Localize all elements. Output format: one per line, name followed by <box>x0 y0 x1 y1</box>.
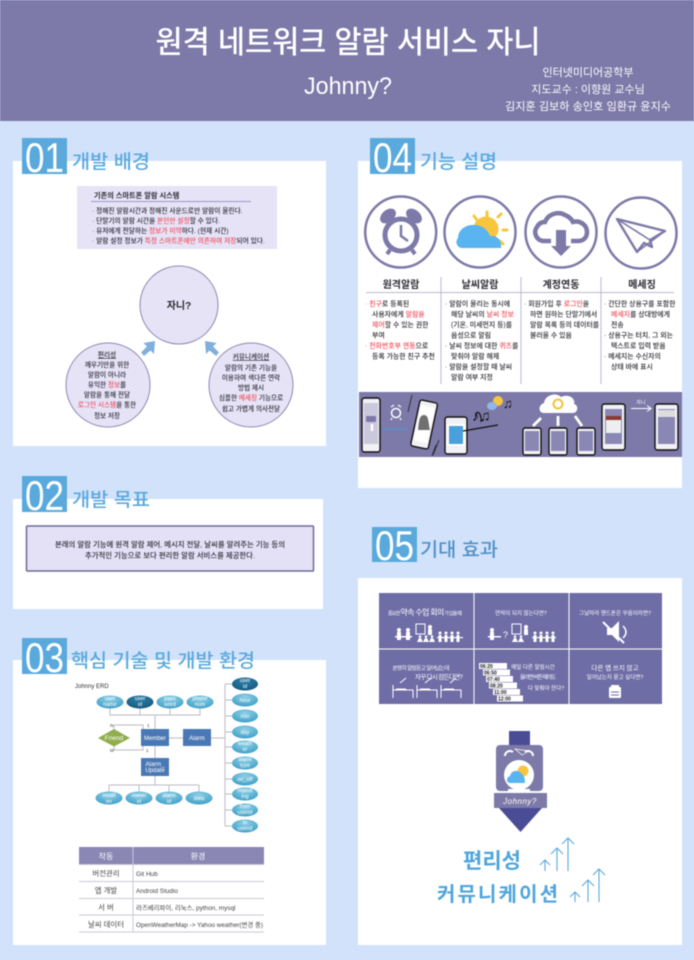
text: messaging: · 메세지는 수신자의 <box>604 352 661 360</box>
ER diagram: 1 <box>147 723 150 728</box>
cell: wake up check: 다른 앱 쓰지 않고 <box>591 663 639 672</box>
circle: convenience: 알람이 아니라 <box>88 370 126 379</box>
cell: wake up check: 일어났는지 묻고 싶다면? <box>587 673 643 681</box>
feature titles: 날씨알람 <box>462 278 498 291</box>
text: messaging <box>604 299 676 371</box>
text: weather alarm: 맞춰야 알람 해제 <box>451 352 499 360</box>
arrows: communication growth <box>570 869 605 902</box>
cell: oversleeping: 자꾸 다시 잠든다면? <box>415 672 463 681</box>
environment table: 서 버 <box>98 903 114 912</box>
panel: 02 goal <box>13 472 323 609</box>
text: account sync: 알람 목록 등의 데이터를 <box>530 320 600 329</box>
member attributes: user <box>135 696 145 702</box>
heading 05: 기대 효과 <box>420 539 498 561</box>
cell: oversleeping <box>392 664 463 698</box>
text: messaging: 텍스트로 입력 받음 <box>611 341 666 350</box>
text: communication: 커뮤니케이션 <box>437 883 558 906</box>
existing alarm system box: · 알람 설정 정보가 특정 스마트폰에만 의존하여 저장되어 있다. <box>92 236 265 245</box>
member attributes: phone <box>192 696 208 702</box>
environment table: 라즈베리파이, 리눅스, python, mysql <box>136 903 235 912</box>
alarm attributes <box>232 678 258 832</box>
feature illustration strip <box>359 392 682 457</box>
cell: important meeting <box>388 607 463 642</box>
alarm attributes: userid <box>238 826 252 832</box>
existing alarm system box: 기존의 스마트폰 알람 시스템 <box>94 191 179 200</box>
small alarm clock <box>391 405 401 420</box>
alarm update attributes: id <box>137 799 141 805</box>
ER diagram: N <box>110 723 113 728</box>
header banner <box>0 0 694 121</box>
text: remote alarm: 부여 <box>372 330 385 340</box>
circle: communication: 쉽고 가볍게 의사전달 <box>222 404 280 413</box>
alarm attributes: alarm <box>238 757 252 763</box>
environment table <box>79 847 264 932</box>
heading 02: 02 <box>25 472 64 519</box>
text: weather alarm: 음성으로 알림 <box>451 330 491 340</box>
member attributes <box>96 696 214 708</box>
text: remote alarm: 등록 가능한 친구 추천 <box>372 352 435 360</box>
cell: oversleeping: 분명히 알람듣고 일어났는데 <box>392 664 450 672</box>
icon: weather <box>444 196 516 268</box>
entity: friend: Friend <box>105 735 124 742</box>
text: messaging: 상태 바에 표시 <box>611 362 653 371</box>
heading 02 <box>22 472 150 519</box>
alarm attributes: from <box>240 804 251 810</box>
heading 04: 기능 설명 <box>420 151 497 173</box>
icon: Johnny emblem arrow: Johnny? <box>502 797 537 806</box>
environment table: OpenWeatherMap -> Yahoo weather(변경 중) <box>136 920 263 929</box>
entity: alarm: Alarm <box>189 736 205 742</box>
cell: many alarms: 다 맞춰야 한다? <box>528 684 564 692</box>
entity: member <box>141 729 169 746</box>
heading 01: 개발 배경 <box>72 151 150 173</box>
alarm attributes: userid <box>238 810 252 816</box>
heading 04: 04 <box>373 134 412 181</box>
member attributes: pass <box>164 696 176 702</box>
text: account sync <box>524 299 600 340</box>
alarm update attributes: id <box>167 799 171 805</box>
circle: Johnny <box>140 266 218 344</box>
cell: wake up check <box>587 663 643 698</box>
cell: no contact <box>488 609 556 642</box>
cell: many alarms: 매일 다른 알람시간 <box>511 663 555 671</box>
cell: many alarms <box>479 663 564 702</box>
panel: 04 features <box>358 134 682 488</box>
team credits: 지도교수 : 이향원 교수님 <box>531 83 645 96</box>
circle: convenience: 로그인 시스템을 통한 <box>78 400 136 409</box>
circle: Johnny: 자니? <box>167 300 191 312</box>
entity: alarm <box>183 729 211 746</box>
feature illustration strip: ♫ <box>503 396 513 411</box>
entity: member: Member <box>144 736 166 742</box>
cell: important meeting: 중요한 약속 수업 회의 가 있을 때 <box>388 607 462 617</box>
circle: convenience <box>66 343 150 427</box>
feature illustration strip: ♪♫ <box>472 408 491 425</box>
goal statement box: 추가적인 기능으로 보다 편리한 알람 서비스를 제공한다. <box>85 551 255 560</box>
environment table: 앱 개발 <box>95 886 117 895</box>
cell: no contact: ? <box>503 630 508 640</box>
alarm update attributes: data <box>194 796 204 802</box>
member attributes: name <box>103 702 117 708</box>
circle: communication: 심플한 메세징 기능으로 <box>219 393 283 402</box>
feature illustration strip: 자니 <box>636 399 646 406</box>
team credits: 인터넷미디어공학부 <box>542 66 634 79</box>
heading 03 <box>22 634 255 681</box>
feature titles <box>383 278 656 291</box>
ER diagram: M <box>110 748 114 753</box>
icon: paper plane <box>606 198 676 268</box>
sync arrows <box>533 416 582 426</box>
problem grid <box>379 593 662 704</box>
text: remote alarm <box>365 299 435 360</box>
text: remote alarm: 제어할 수 있는 권한 <box>372 320 429 329</box>
heading 02: 개발 목표 <box>72 489 150 511</box>
text: convenience: 편리성 <box>463 850 521 873</box>
cell: silent phone: 그날따라 핸드폰은 무음이라면? <box>579 609 651 617</box>
circle: communication: 이용하여 색다른 연락 <box>222 373 280 382</box>
text: account sync: 하면 원하는 단말기에서 <box>530 310 597 318</box>
feature titles: 메세징 <box>628 278 656 291</box>
subtitle: Johnny? <box>304 73 392 100</box>
heading 05 <box>372 522 498 569</box>
send arrow <box>631 406 651 412</box>
text: weather alarm: 해당 날씨의 날씨 정보 <box>451 310 514 318</box>
alarm update attributes: ier <box>106 799 112 805</box>
alarm update attributes: alarm <box>162 793 176 799</box>
alarm attributes: er <box>243 747 248 753</box>
ER diagram: Johnny ERD <box>75 684 109 690</box>
cell: many alarms: 12:00 <box>498 696 511 702</box>
ER diagram: 1 <box>146 748 149 753</box>
arrow: convenience to Johnny <box>141 341 155 356</box>
text: weather alarm: (기온, 미세먼지 등)를 <box>451 320 513 329</box>
text: remote alarm: 사용자에게 알람을 <box>372 310 425 318</box>
environment table: 날씨 데이터 <box>88 920 124 929</box>
text: weather alarm: · 알람을 설정할 때 날씨 <box>445 362 512 371</box>
panel: 05 expected effects <box>358 522 682 945</box>
cell: no contact: 연락이 되지 않는다면? <box>495 609 547 617</box>
sync cloud <box>540 395 577 413</box>
alarm attributes: type <box>240 763 250 769</box>
circle: communication <box>209 343 293 427</box>
existing alarm system box: · 유저에게 전달하는 정보가 미약하다. (현재 시간) <box>92 226 229 235</box>
environment table: 작동 <box>99 851 113 861</box>
circle: convenience: 유익한 정보를 <box>88 380 126 389</box>
icon: cloud download <box>526 196 596 268</box>
alarm attributes: id <box>243 684 247 690</box>
heading 01: 01 <box>25 134 64 181</box>
alarm attributes: on_off <box>238 777 253 783</box>
entity: alarm update: Alarm_ <box>145 762 165 768</box>
heading 03: 핵심 기술 및 개발 환경 <box>71 650 255 672</box>
goal statement box: 본래의 알람 기능에 원격 알람 제어, 메시지 전달, 날씨를 알려주는 기능 등의 <box>55 540 285 549</box>
feature titles: 계정연동 <box>543 278 579 291</box>
feature titles: 원격알람 <box>383 278 419 291</box>
team credits: 김지훈 김보하 송인호 임환규 윤지수 <box>505 99 671 113</box>
entity: friend <box>98 729 130 746</box>
circle: convenience: 정보 저장 <box>94 411 120 420</box>
cell: many alarms: 08:20 <box>490 684 503 690</box>
arrow: communication to Johnny <box>205 341 219 356</box>
heading 05: 05 <box>375 522 414 569</box>
environment table: Git Hub <box>136 871 158 878</box>
environment table: 환경 <box>191 851 205 861</box>
icon: alarm clock <box>365 196 436 268</box>
alarm attributes: to <box>243 820 247 826</box>
circle: communication: 커뮤니케이션 <box>233 352 269 361</box>
ER diagram <box>75 678 258 832</box>
text: messaging: 전송 <box>611 320 624 329</box>
member attributes: word <box>163 702 176 708</box>
existing alarm system box: · 단말기의 알람 시간을 본인만 설정할 수 있다. <box>92 216 220 225</box>
alarm attributes: ing <box>241 794 249 800</box>
text: messaging: · 간단한 상용구를 포함한 <box>604 299 676 308</box>
text: messaging: · 상용구는 터치, 그 외는 <box>604 330 674 340</box>
alarm attributes: repeat <box>237 788 253 794</box>
arrows: convenience growth <box>540 838 574 871</box>
entity: alarm update <box>141 758 169 776</box>
weather and music notes <box>463 412 498 431</box>
cell: silent phone <box>579 609 651 643</box>
member attributes: user <box>105 696 115 702</box>
alarm update attributes <box>96 792 212 805</box>
entity: alarm update: Update <box>145 768 165 774</box>
existing alarm system box <box>77 186 277 249</box>
title: 원격 네트워크 알람 서비스 자니 <box>156 25 540 60</box>
text: weather alarm: 알람 여부 지정 <box>451 372 493 382</box>
alarm attributes: day <box>241 730 250 736</box>
goal statement box <box>26 526 314 571</box>
text: weather alarm: · 날씨 정보에 대한 퀴즈를 <box>445 341 519 350</box>
cell: many alarms: 11:00 <box>494 690 507 696</box>
phones <box>362 398 678 455</box>
alarm attributes: user <box>240 678 250 684</box>
icon: Johnny emblem arrow <box>494 731 547 832</box>
text: account sync: · 회원가입 후 로그인을 <box>524 299 589 308</box>
team credits <box>505 66 671 113</box>
environment table: Android Studio <box>136 888 178 895</box>
panel: 01 background <box>13 134 326 446</box>
heading 01 <box>22 134 150 181</box>
alarm update attributes: owner <box>132 793 147 799</box>
cell: many alarms: 07:40 <box>487 677 500 683</box>
cell: many alarms: 울려면 버튼 때려도 <box>520 673 556 681</box>
panel: 03 core technology <box>13 634 326 945</box>
environment table: 버전관리 <box>92 869 120 878</box>
cell: many alarms: 06:50 <box>484 670 497 676</box>
cell: many alarms: 06:20 <box>480 664 493 670</box>
member attributes: id <box>138 702 142 708</box>
circle: convenience: 알람을 통해 전달 <box>84 390 130 399</box>
heading 04 <box>370 134 497 181</box>
text: remote alarm: · 친구로 등록된 <box>365 299 409 308</box>
member attributes: num <box>195 702 206 708</box>
motion lines <box>408 395 439 456</box>
circle: convenience: 편리성 <box>98 350 116 359</box>
text: messaging: 메세지를 상대방에게 <box>611 310 670 318</box>
text: weather alarm: · 알람이 울리는 동시에 <box>445 299 510 308</box>
circle: convenience: 깨우기만을 위한 <box>85 360 129 369</box>
heading 03: 03 <box>25 634 64 681</box>
circle: communication: 알람의 기존 기능을 <box>225 363 277 372</box>
alarm attributes: weath <box>237 741 252 747</box>
alarm attributes: hour <box>240 698 251 704</box>
text: weather alarm <box>445 299 519 382</box>
alarm attributes: min <box>241 714 249 720</box>
existing alarm system box: · 정해진 알람시간과 정해진 사운드로만 알람이 울린다. <box>92 206 243 215</box>
alarm update attributes: modif <box>102 793 116 799</box>
text: remote alarm: · 전화번호부 연동으로 <box>365 341 429 350</box>
circle: communication: 방법 제시 <box>238 383 264 392</box>
text: account sync: 불러올 수 있음 <box>530 330 572 340</box>
